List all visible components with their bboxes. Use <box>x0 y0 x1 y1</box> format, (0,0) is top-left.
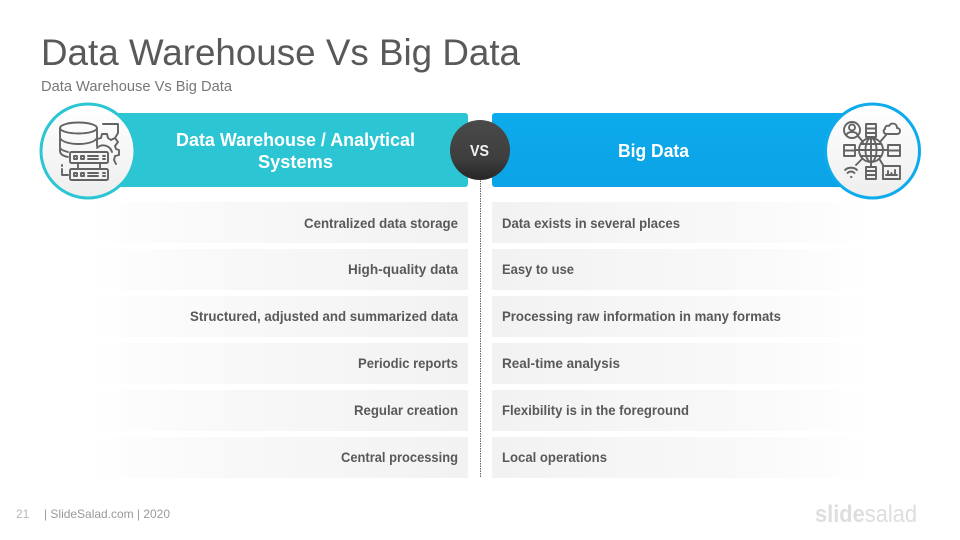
row: periodic reports: Periodic reports <box>358 355 458 371</box>
server units <box>62 152 108 180</box>
gear and bracket <box>97 124 119 164</box>
logo: slidesalad: slidesalad <box>815 501 917 528</box>
row: central processing: Central processing <box>341 449 458 465</box>
row: centralized data storage <box>92 202 468 243</box>
header: data warehouse: Systems <box>258 152 333 172</box>
row: structured data <box>92 296 468 337</box>
center dotted divider <box>480 178 482 478</box>
header: data warehouse: Data Warehouse / Analytical <box>176 130 415 150</box>
cloud node <box>880 124 900 142</box>
row: periodic reports <box>92 343 468 384</box>
row: real-time analysis <box>492 343 868 384</box>
row: structured data: Structured, adjusted and summarized data <box>190 308 458 324</box>
database cylinder <box>60 122 97 157</box>
panel: big data rows <box>492 202 868 478</box>
top server node <box>866 124 876 137</box>
row: local operations <box>492 437 868 478</box>
row: high-quality data: High-quality data <box>348 261 458 277</box>
panel: data warehouse rows <box>92 202 468 478</box>
row: regular creation <box>92 390 468 431</box>
title: Data Warehouse Vs Big Data <box>41 32 520 73</box>
row: real-time analysis: Real-time analysis <box>502 355 620 371</box>
row: easy to use <box>492 249 868 290</box>
globe <box>859 138 883 162</box>
header: big data: Big Data <box>618 141 690 161</box>
subtitle: Data Warehouse Vs Big Data <box>41 78 233 95</box>
page number: 21 <box>16 507 30 521</box>
icon: big data badge <box>826 104 920 198</box>
wifi node <box>845 159 862 177</box>
row: easy to use: Easy to use <box>502 261 574 277</box>
footer text: | SlideSalad.com | 2020 <box>44 507 170 521</box>
header: big data <box>492 113 860 187</box>
left server node <box>844 145 859 156</box>
row: high-quality data <box>92 249 468 290</box>
vs badge: VS <box>470 143 489 160</box>
row: data exists in several places: Data exists in several places <box>502 215 680 231</box>
row: flexibility: Flexibility is in the foreground <box>502 402 689 418</box>
row: processing raw information: Processing raw information in many formats <box>502 308 781 324</box>
row: data exists in several places <box>492 202 868 243</box>
header: data warehouse <box>100 113 468 187</box>
bottom server node <box>866 162 876 179</box>
right server node <box>883 145 900 156</box>
chart node <box>880 160 900 179</box>
row: processing raw information <box>492 296 868 337</box>
vs badge <box>450 120 510 180</box>
row: local operations: Local operations <box>502 449 607 465</box>
row: regular creation: Regular creation <box>354 402 458 418</box>
row: centralized data storage: Centralized data storage <box>304 215 458 231</box>
icon: data warehouse badge <box>41 104 135 198</box>
row: central processing <box>92 437 468 478</box>
row: flexibility <box>492 390 868 431</box>
user node <box>844 122 863 142</box>
